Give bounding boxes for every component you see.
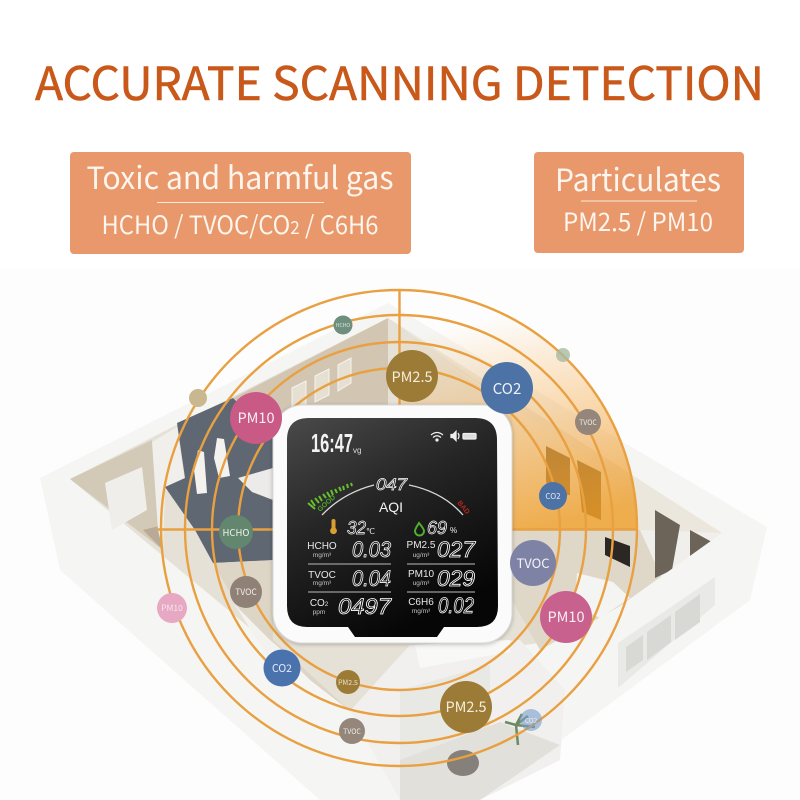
readings: 0.03 (352, 537, 392, 562)
bubble: PM10 left (230, 392, 282, 444)
bubble: CO2 faint (520, 709, 542, 731)
bubble: HCHO small top: HCHO (336, 322, 350, 329)
bubble: TVOC left: TVOC (235, 586, 257, 598)
bubble: PM2.5 bottom (440, 681, 492, 733)
bubble: TVOC small right (575, 409, 601, 435)
temperature: 32 (347, 518, 366, 538)
AQI gauge: 047 (376, 475, 408, 494)
readings: 0.04 (352, 566, 391, 591)
heading: toxic gas: Toxic and harmful gas (86, 153, 394, 198)
bubble: HCHO left: HCHO (223, 525, 249, 539)
bubble: TVOC small bottom: TVOC (343, 727, 361, 737)
bubble: PM2.5 top: PM2.5 (391, 366, 433, 387)
readings: PM10 (408, 569, 434, 580)
bubble: PM2.5 small (336, 670, 360, 694)
particulate list: PM2.5 / PM10 (563, 203, 713, 239)
readings: mg/m³ (313, 552, 332, 559)
device: vg (353, 446, 361, 455)
bubble: PM10 right: PM10 (547, 606, 585, 627)
readings: ppm (313, 609, 325, 616)
bubble: HCHO left (219, 515, 253, 549)
status icons (431, 432, 476, 441)
bubble: TVOC right (510, 540, 556, 586)
readings: ug/m³ (413, 552, 430, 559)
AQI gauge (308, 475, 471, 516)
bubble: HCHO small top (334, 316, 352, 334)
device (273, 405, 512, 643)
bubble: CO2 small right: CO2 (545, 491, 561, 502)
bubble: CO2 top (481, 362, 533, 414)
house illustration (0, 268, 800, 800)
readings: TVOC (308, 570, 336, 581)
readings: CO2 (310, 598, 329, 609)
bubble: PM10 right (540, 591, 592, 643)
readings (307, 537, 476, 619)
bubble: CO2 left (264, 650, 300, 686)
bubble: CO2 top: CO2 (493, 378, 521, 399)
readings: 0497 (338, 594, 392, 619)
orange scan wedge (400, 322, 636, 528)
readings: 027 (437, 537, 476, 562)
bubble: PM10 faint: PM10 (161, 602, 183, 614)
readings: HCHO (307, 541, 337, 552)
heading: particulates: Particulates (555, 155, 721, 200)
readings: ug/m³ (413, 580, 430, 587)
clock: 16:47 (311, 428, 353, 458)
humidity: 69 (427, 518, 447, 538)
panel: toxic and harmful gas (70, 152, 411, 254)
AQI gauge: BAD (455, 500, 471, 516)
gas list: HCHO / TVOC/CO2 / C6H6 (102, 206, 378, 242)
bubble: TVOC right: TVOC (516, 553, 550, 572)
bubble: PM2.5 top (386, 350, 438, 402)
bubble: TVOC left (230, 576, 262, 608)
temperature: ℃ (366, 527, 375, 536)
bubble: TVOC small right: TVOC (579, 418, 597, 428)
bubble: CO2 small right (539, 482, 567, 510)
panel: particulates (534, 152, 744, 253)
temperature (330, 518, 375, 538)
AQI gauge: AQI (379, 499, 403, 515)
bubble: beige ball (189, 389, 207, 407)
bubble: CO2 left: CO2 (272, 661, 292, 676)
readings: PM2.5 (407, 540, 436, 551)
bubble: PM10 faint (157, 593, 187, 623)
readings: 0.02 (438, 593, 474, 618)
scan rings (158, 290, 638, 766)
bubble: PM2.5 small: PM2.5 (338, 678, 358, 688)
screen (287, 418, 498, 637)
title: ACCURATE SCANNING DETECTION (35, 48, 764, 114)
humidity: % (450, 526, 457, 535)
bubble: PM10 left: PM10 (237, 407, 275, 428)
readings: mg/m³ (412, 608, 431, 615)
humidity (415, 518, 457, 538)
readings: mg/m³ (313, 580, 332, 587)
bubble: CO2 faint: CO2 (525, 715, 538, 725)
readings: 029 (437, 566, 475, 591)
bubble: PM2.5 bottom: PM2.5 (445, 696, 487, 717)
bubble: green faint dot (556, 348, 570, 362)
bubble: TVOC small bottom (339, 718, 365, 744)
AQI gauge: GOOD (317, 494, 337, 513)
readings: C6H6 (408, 597, 434, 608)
